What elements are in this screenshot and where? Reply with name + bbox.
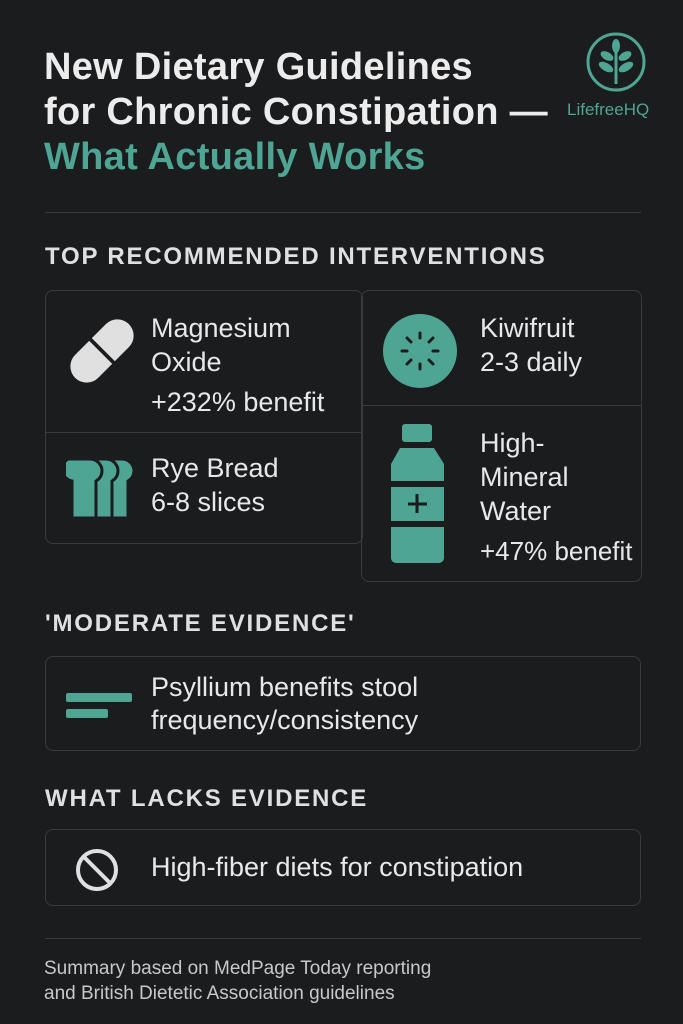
text: water (480, 428, 633, 566)
text: water: High- (480, 428, 545, 458)
text: magnesium (151, 313, 324, 417)
logo: LifefreeHQ (567, 100, 649, 119)
heading: top interventions: TOP RECOMMENDED INTERVENTIONS (45, 243, 547, 270)
text: water: +47% benefit (480, 536, 633, 566)
text: psyllium: frequency/consistency (151, 705, 418, 735)
title: for Chronic Constipation — (44, 91, 548, 133)
title (44, 46, 548, 178)
icon: kiwi (383, 314, 457, 388)
title: What Actually Works (44, 136, 426, 178)
logo (567, 32, 649, 119)
panel: psyllium (45, 656, 641, 751)
icon: bars (66, 693, 132, 718)
panel: interventions left (45, 290, 363, 544)
text: magnesium: Magnesium (151, 313, 291, 343)
heading: lacks: WHAT LACKS EVIDENCE (45, 785, 368, 812)
text: water: Water (480, 496, 551, 526)
text: kiwi (480, 313, 582, 377)
icon: bottle (391, 424, 444, 563)
footer: and British Dietetic Association guidelines (44, 983, 395, 1004)
text: rye (151, 453, 279, 517)
icon: pill (70, 319, 134, 383)
icon: bread (66, 460, 132, 516)
text: kiwi: Kiwifruit (480, 313, 575, 343)
text: water: Mineral (480, 462, 569, 492)
text: magnesium: +232% benefit (151, 387, 324, 417)
text: magnesium: Oxide (151, 347, 222, 377)
heading: moderate: 'MODERATE EVIDENCE' (45, 610, 356, 637)
title: New Dietary Guidelines (44, 46, 473, 88)
text: rye: Rye Bread (151, 453, 279, 483)
panel: interventions right (361, 290, 642, 582)
icon: prohibited (76, 849, 118, 891)
text: rye: 6-8 slices (151, 487, 265, 517)
text: psyllium (151, 672, 418, 735)
footer: Summary based on MedPage Today reporting (44, 958, 431, 979)
footer (44, 958, 431, 1004)
text: psyllium: Psyllium benefits stool (151, 672, 418, 702)
panel: high fiber (45, 829, 641, 906)
text: fiber: High-fiber diets for constipation (151, 852, 523, 882)
text: kiwi: 2-3 daily (480, 347, 582, 377)
